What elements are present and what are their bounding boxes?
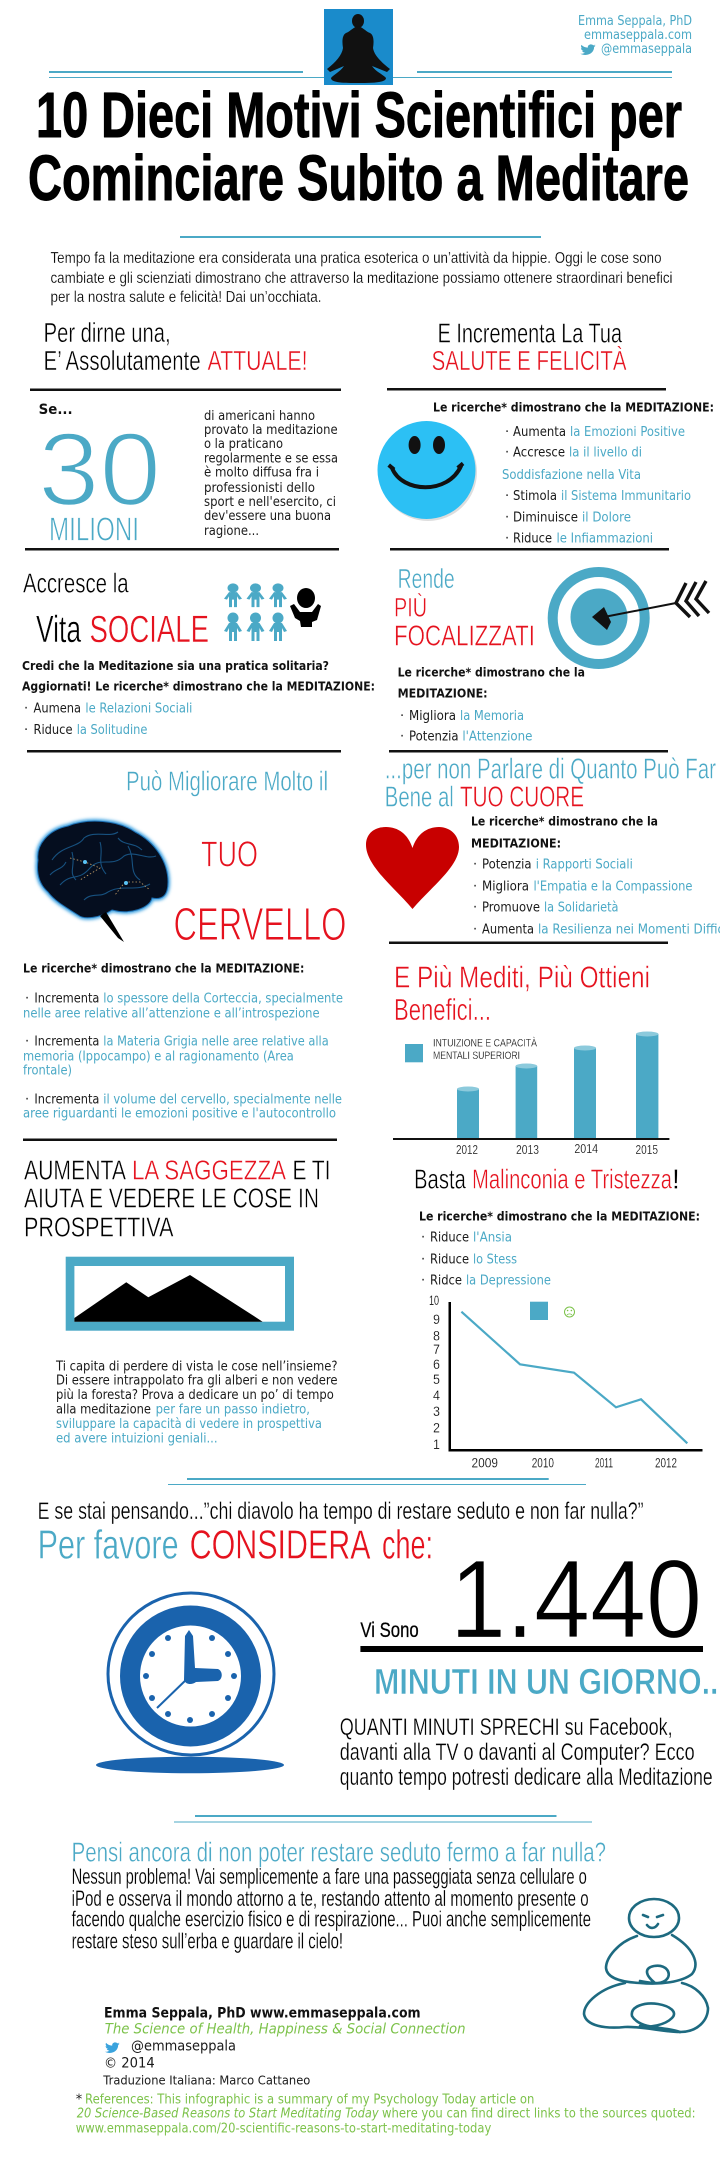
- icon: clock: [96, 1593, 284, 1773]
- list: cervello: lo spessore della Corteccia, specialmente: [103, 992, 343, 1007]
- text: americani: di americani hanno: [204, 409, 315, 424]
- list: benefici salute: la Emozioni Positive: [570, 425, 685, 440]
- list: focalizzati: l'Attenzione: [462, 730, 532, 745]
- stat: 1440: Vi Sono: [360, 1619, 419, 1642]
- list: benefici salute: [502, 425, 691, 547]
- credits: @emmaseppala: [131, 2039, 236, 2055]
- stat: 30 milioni: 30: [38, 412, 161, 528]
- panel: piu mediti: [393, 959, 669, 1157]
- text: nessun problema: restare steso sull’erba e guardare il cielo!: [72, 1929, 343, 1954]
- list: cuore: l'Empatia e la Compassione: [534, 880, 692, 895]
- list: malinconia: [419, 1209, 700, 1289]
- icon: twitter: [105, 2042, 120, 2053]
- line chart: [429, 1292, 702, 1470]
- heading: focalizzati: Rende: [398, 563, 455, 594]
- credits: © 2014: [104, 2055, 155, 2071]
- list: sociale: Aggiornati! Le ricerche* dimostrano che la MEDITAZIONE:: [22, 679, 375, 694]
- list: focalizzati: la Memoria: [460, 709, 524, 724]
- list: sociale: ·: [24, 723, 28, 738]
- list: focalizzati: ·: [400, 709, 404, 724]
- heading: vita sociale: SOCIALE: [90, 609, 209, 651]
- list: cervello: il volume del cervello, specialmente nelle: [103, 1092, 342, 1107]
- panel: malinconia: [414, 1163, 702, 1470]
- list: malinconia: ·: [421, 1274, 425, 1289]
- list: benefici salute: Aumenta: [513, 425, 566, 440]
- list: malinconia: lo Stess: [473, 1253, 517, 1268]
- heading: cervello: Può Migliorare Molto il: [126, 766, 328, 797]
- credits: The Science of Health, Happiness & Social Connection: [105, 2021, 466, 2037]
- list: cervello: nelle aree relative all’attenzione e all’introspezione: [23, 1007, 320, 1022]
- heading: malinconia: Basta: [414, 1163, 466, 1194]
- list: cuore: Migliora: [482, 880, 529, 895]
- heading: cuore: [385, 753, 716, 814]
- icon: meditating silhouette: [324, 9, 393, 85]
- list: benefici salute: il Dolore: [582, 511, 631, 526]
- list: cervello: frontale): [23, 1064, 72, 1079]
- heading: malinconia: [414, 1163, 680, 1194]
- list: sociale: la Solitudine: [77, 723, 147, 738]
- list: focalizzati: Potenzia: [409, 730, 458, 745]
- list: benefici salute: il Sistema Immunitario: [561, 489, 691, 504]
- heading: salute: SALUTE E FELICITÀ: [432, 345, 627, 376]
- list: benefici salute: Stimola: [513, 489, 557, 504]
- author credit: [578, 14, 692, 57]
- text: prospettiva: più la foresta? Prova a dedicare un po’ di tempo: [56, 1388, 334, 1403]
- panel: attuale: [25, 317, 341, 550]
- list: cervello: la Materia Grigia nelle aree relative alla: [103, 1035, 329, 1050]
- bar chart: 2014: [574, 1141, 598, 1156]
- line chart: 2010: [532, 1454, 554, 1470]
- list: cervello: memoria (Ippocampo) e al ragionamento (Area: [23, 1050, 294, 1065]
- text: americani: ragione...: [204, 524, 259, 539]
- icon: target: [553, 572, 709, 664]
- heading: cuore: Bene al: [385, 782, 454, 814]
- text: americani: o la praticano: [204, 437, 283, 452]
- list: cervello: Le ricerche* dimostrano che la MEDITAZIONE:: [23, 961, 304, 976]
- list: sociale: ·: [24, 702, 28, 717]
- heading: saggezza: AUMENTA: [24, 1154, 126, 1185]
- line chart: 3: [433, 1403, 440, 1419]
- stat: 1440: 1.440: [450, 1538, 702, 1662]
- text: americani: [204, 409, 338, 539]
- references: References: This infographic is a summary of my Psychology Today article on: [85, 2092, 534, 2107]
- list: cervello: ·: [25, 992, 29, 1007]
- panel: nessun problema: [72, 1837, 708, 2032]
- list: cuore: ·: [473, 858, 477, 873]
- line chart: 8: [433, 1328, 440, 1344]
- list: sociale: le Relazioni Sociali: [85, 702, 192, 717]
- list: cervello: Incrementa: [34, 992, 99, 1007]
- line chart: 7: [433, 1341, 440, 1357]
- line chart: 2: [433, 1420, 440, 1436]
- text: americani: professionisti dello: [204, 481, 315, 496]
- list: malinconia: la Depressione: [466, 1274, 551, 1289]
- heading: considera: [38, 1498, 644, 1567]
- header: [49, 9, 692, 85]
- list: malinconia: Ridce: [430, 1274, 462, 1289]
- list: malinconia: Riduce: [430, 1253, 469, 1268]
- text: americani: regolarmente e se essa: [204, 452, 338, 467]
- heading: piu mediti: Benefici...: [394, 992, 491, 1027]
- heading: vita sociale: Vita: [36, 609, 82, 651]
- icon: brain: [37, 821, 168, 942]
- line chart: 1: [433, 1436, 440, 1452]
- line chart: 4: [433, 1387, 440, 1403]
- text: prospettiva: sviluppare la capacità di vedere in prospettiva: [56, 1417, 322, 1432]
- heading: saggezza: PROSPETTIVA: [24, 1212, 174, 1243]
- legend: INTUIZIONE E CAPACITÀ: [433, 1037, 538, 1050]
- list: benefici salute: ·: [505, 446, 509, 461]
- credits: Emma Seppala, PhD www.emmaseppala.com: [104, 2005, 421, 2021]
- text: prospettiva: Ti capita di perdere di vista le cose nell’insieme?: [55, 1360, 337, 1375]
- credits: Traduzione Italiana: Marco Cattaneo: [102, 2073, 310, 2088]
- heading: attuale: Per dirne una,: [44, 317, 171, 348]
- list: benefici salute: ·: [505, 511, 509, 526]
- bar chart: 2013: [516, 1142, 539, 1157]
- heading: vita sociale: [23, 568, 209, 651]
- line chart: 2009: [472, 1454, 498, 1470]
- credits: [102, 2005, 466, 2088]
- heading: considera: CONSIDERA: [190, 1521, 371, 1567]
- list: benefici salute: le Infiammazioni: [556, 532, 653, 547]
- heading: considera: che:: [382, 1521, 433, 1567]
- references: 20 Science-Based Reasons to Start Meditating Today: [77, 2106, 379, 2121]
- list: focalizzati: [398, 665, 585, 745]
- heading: cervello: CERVELLO: [174, 898, 346, 950]
- heading: focalizzati: PIÙ: [394, 592, 427, 623]
- text: prospettiva: per fare un passo indietro,: [156, 1403, 310, 1418]
- list: sociale: Aumena: [34, 702, 81, 717]
- list: cuore: ·: [473, 880, 477, 895]
- list: cervello: Incrementa: [34, 1035, 99, 1050]
- panel: salute e felicita: [378, 317, 714, 550]
- list: focalizzati: MEDITAZIONE:: [398, 686, 488, 701]
- icon: heart: [366, 827, 459, 909]
- panel: 1440 minuti: [38, 1498, 719, 1791]
- heading: saggezza: LA SAGGEZZA: [132, 1154, 286, 1185]
- list: cuore: la Solidarietà: [544, 901, 618, 916]
- line chart: 2011: [595, 1454, 613, 1470]
- list: cuore: [471, 814, 720, 938]
- list: cuore: Promuove: [482, 901, 540, 916]
- list: benefici salute: Diminuisce: [513, 511, 578, 526]
- list: benefici salute: ·: [505, 425, 509, 440]
- icon: mountain frame: [66, 1257, 294, 1331]
- text: americani: dev'essere una buona: [204, 509, 331, 524]
- heading: attuale: E’ Assolutamente: [44, 345, 201, 376]
- list: sociale: Riduce: [34, 723, 73, 738]
- bar chart: [393, 1032, 669, 1157]
- icon: smiley: [378, 421, 477, 521]
- legend: MENTALI SUPERIORI: [433, 1050, 520, 1062]
- list: sociale: Credi che la Meditazione sia una pratica solitaria?: [22, 658, 329, 673]
- intro text: per la nostra salute e felicità! Dai un’occhiata.: [50, 289, 322, 306]
- title: [28, 79, 689, 214]
- text: americani: provato la meditazione: [204, 423, 338, 438]
- heading: piu mediti: [394, 959, 650, 1027]
- line chart: 10: [429, 1292, 439, 1308]
- heading: saggezza: AIUTA E VEDERE LE COSE IN: [24, 1182, 319, 1213]
- list: cervello: Incrementa: [34, 1092, 99, 1107]
- bar chart: 2012: [456, 1142, 478, 1157]
- heading: vita sociale: Accresce la: [23, 568, 129, 599]
- list: benefici salute: Accresce: [513, 446, 565, 461]
- text: prospettiva: ed avere intuizioni geniali...: [56, 1432, 218, 1447]
- list: cuore: Aumenta: [482, 923, 534, 938]
- list: cuore: ·: [473, 923, 477, 938]
- heading: salute: [432, 317, 627, 376]
- references: *: [76, 2092, 83, 2107]
- list: cuore: Le ricerche* dimostrano che la: [471, 814, 658, 829]
- bar chart: 2015: [636, 1142, 658, 1157]
- list: cervello: ·: [25, 1035, 29, 1050]
- references: [76, 2092, 696, 2137]
- heading: cervello: [126, 766, 346, 950]
- heading: cuore: TUO CUORE: [460, 782, 584, 814]
- panel: cuore: [366, 753, 720, 944]
- heading: salute: E Incrementa La Tua: [438, 317, 622, 348]
- icon: people: [224, 583, 321, 641]
- text: minuti sprecati: [340, 1714, 713, 1791]
- author credit: Emma Seppala, PhD: [578, 14, 692, 29]
- list: sociale: [22, 658, 375, 738]
- list: malinconia: ·: [421, 1253, 425, 1268]
- heading: saggezza: [24, 1154, 330, 1243]
- heading: attuale: [44, 317, 307, 376]
- legend: [405, 1037, 538, 1062]
- panel: vita sociale: [22, 568, 375, 752]
- list: cervello: aree riguardanti le emozioni positive e l'autocontrollo: [23, 1107, 336, 1122]
- list: benefici salute: Riduce: [513, 532, 552, 547]
- stat: 1440: [360, 1538, 718, 1702]
- list: focalizzati: ·: [400, 730, 404, 745]
- list: cervello: ·: [25, 1092, 29, 1107]
- author credit: emmaseppala.com: [584, 28, 692, 43]
- text: nessun problema: [72, 1864, 591, 1954]
- list: cervello: [23, 961, 343, 1122]
- text: prospettiva: Di essere intrappolato fra gli alberi e non vedere: [56, 1374, 338, 1389]
- legend: [530, 1302, 574, 1320]
- author credit: @emmaseppala: [601, 42, 692, 57]
- panel: cervello: [23, 766, 346, 1141]
- list: cuore: i Rapporti Sociali: [536, 858, 633, 873]
- list: cuore: MEDITAZIONE:: [471, 836, 561, 851]
- text: americani: sport e nell'esercito, ci: [204, 495, 336, 510]
- heading: focalizzati: [394, 563, 535, 653]
- heading: cervello: TUO: [201, 834, 258, 875]
- heading: malinconia: !: [672, 1163, 680, 1194]
- icon: meditating figure: [584, 1899, 708, 2032]
- line chart: 5: [433, 1371, 440, 1387]
- list: focalizzati: Le ricerche* dimostrano che la: [398, 665, 585, 680]
- text: americani: è molto diffusa fra i: [204, 466, 319, 481]
- line chart: 6: [433, 1356, 440, 1372]
- list: benefici salute: la il livello di: [569, 446, 642, 461]
- list: malinconia: l'Ansia: [473, 1231, 512, 1246]
- list: benefici salute: ·: [505, 532, 509, 547]
- heading: attuale: ATTUALE!: [208, 345, 308, 376]
- heading: piu mediti: E Più Mediti, Più Ottieni: [394, 959, 650, 994]
- heading: focalizzati: FOCALIZZATI: [394, 621, 535, 653]
- panel: focalizzati: [389, 563, 709, 752]
- list: benefici salute: Soddisfazione nella Vita: [502, 468, 641, 483]
- heading: considera: Per favore: [38, 1521, 179, 1567]
- list: cuore: ·: [473, 901, 477, 916]
- list: benefici salute: ·: [505, 489, 509, 504]
- intro text: [50, 250, 672, 306]
- text: prospettiva: alla meditazione: [56, 1403, 151, 1418]
- heading: saggezza: E TI: [292, 1154, 330, 1185]
- list: cuore: Potenzia: [482, 858, 532, 873]
- text: prospettiva: [55, 1360, 338, 1447]
- list: malinconia: ·: [421, 1231, 425, 1246]
- stat: 30 milioni: MILIONI: [49, 511, 139, 548]
- stat: 30 milioni: Se...: [39, 402, 73, 418]
- panel: saggezza: [24, 1154, 338, 1447]
- list: malinconia: Riduce: [430, 1231, 469, 1246]
- list: focalizzati: Migliora: [409, 709, 456, 724]
- line chart: 2012: [655, 1454, 677, 1470]
- references: www.emmaseppala.com/20-scientific-reasons-to-start-meditating-today: [76, 2122, 492, 2137]
- line chart: 9: [433, 1311, 440, 1327]
